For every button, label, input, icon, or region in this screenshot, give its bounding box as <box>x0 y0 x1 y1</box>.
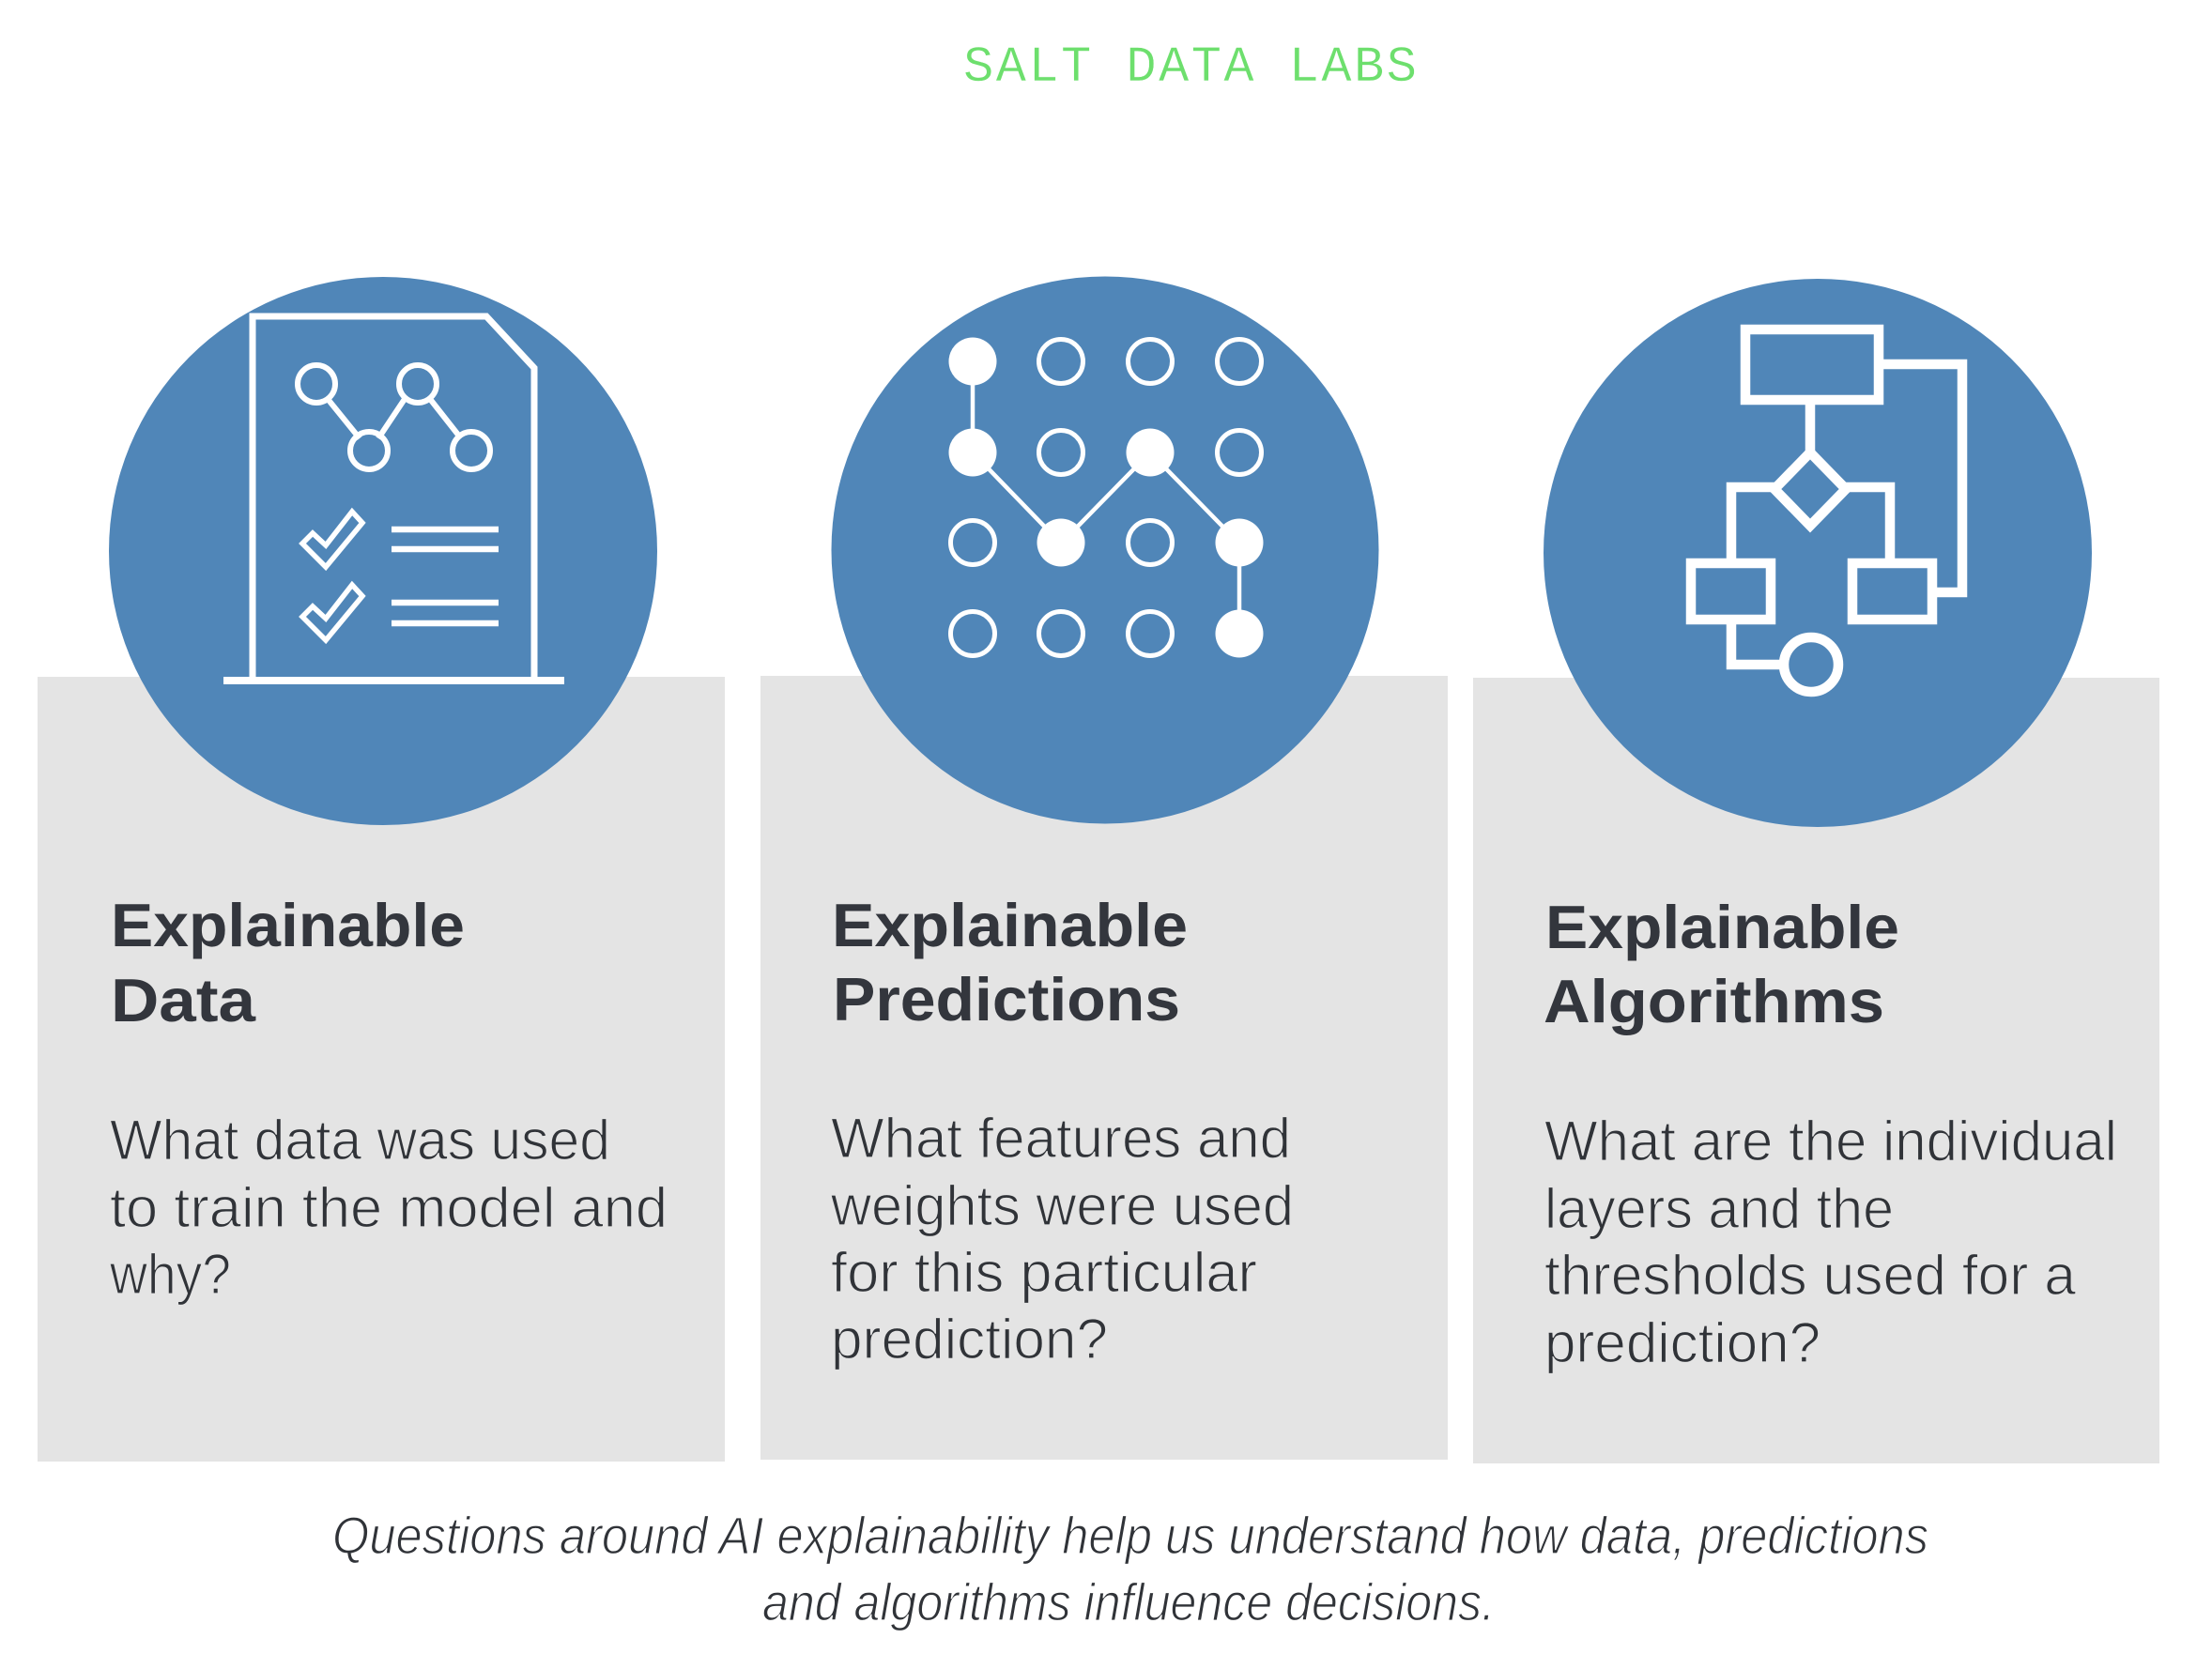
body text: why? <box>109 1243 231 1306</box>
heading <box>1544 893 1899 1035</box>
body text: prediction? <box>1544 1311 1820 1374</box>
body text: for this particular <box>831 1241 1257 1304</box>
heading: Explainable <box>832 891 1188 959</box>
icon: document with chart and checklist <box>223 316 564 681</box>
heading: Data <box>111 966 256 1034</box>
body text: to train the model and <box>110 1176 668 1239</box>
body text: weights were used <box>830 1174 1294 1237</box>
panel background <box>1473 678 2159 1463</box>
panel: Explainable Predictions <box>760 276 1448 1460</box>
heading: Algorithms <box>1544 967 1884 1035</box>
icon: flowchart <box>1691 329 1962 692</box>
circle badge <box>109 277 657 825</box>
body text: thresholds used for a <box>1544 1244 2077 1307</box>
body text <box>109 1109 668 1306</box>
body text: What features and <box>831 1107 1291 1170</box>
caption: Questions around AI explainability help us understand how data, predictions <box>332 1506 1928 1565</box>
caption: and algorithms influence decisions. <box>762 1572 1495 1631</box>
caption <box>332 1506 1928 1631</box>
panel background <box>38 677 725 1462</box>
heading <box>111 891 465 1034</box>
icon: dot grid path <box>948 338 1264 657</box>
body text <box>830 1107 1294 1370</box>
heading: Explainable <box>1545 893 1899 961</box>
circle badge <box>832 276 1378 824</box>
panel: Explainable Algorithms <box>1473 279 2159 1463</box>
heading <box>832 891 1188 1034</box>
title: Salt Data Labs: SALT DATA LABS <box>963 39 1417 97</box>
body text: prediction? <box>831 1308 1108 1370</box>
heading: Explainable <box>111 891 465 959</box>
body text <box>1544 1110 2117 1374</box>
panel: Explainable Data <box>38 277 725 1462</box>
body text: layers and the <box>1544 1177 1894 1240</box>
body text: What are the individual <box>1544 1110 2117 1172</box>
heading: Predictions <box>833 965 1180 1034</box>
panel background <box>760 676 1448 1460</box>
circle badge <box>1544 279 2092 827</box>
body text: What data was used <box>110 1109 610 1171</box>
